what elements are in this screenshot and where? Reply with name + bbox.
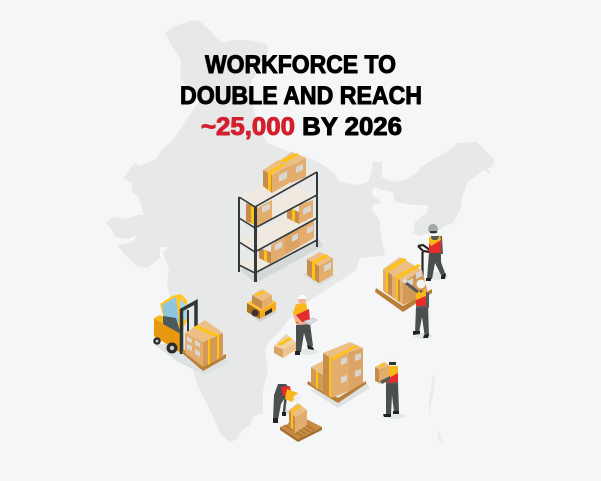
shelf box left — [246, 200, 272, 226]
worker inspecting — [403, 279, 432, 339]
shelf boxes middle — [287, 200, 313, 224]
forklift pallet — [182, 349, 226, 371]
forklift body — [154, 318, 181, 353]
forklift — [153, 294, 230, 375]
title: WORKFORCE TO — [205, 51, 396, 79]
second shelf — [239, 186, 317, 228]
pallet of boxes right — [375, 257, 432, 312]
robot carrier with box — [247, 289, 277, 322]
pallet under box — [280, 418, 322, 439]
third shelf — [239, 209, 317, 252]
top shelf boxes — [263, 152, 306, 193]
India map silhouette — [106, 20, 495, 444]
shelf frame — [239, 172, 317, 282]
title — [180, 51, 422, 141]
shelving unit with boxes — [239, 152, 323, 283]
top shelf — [239, 163, 317, 207]
worker bending over box — [273, 384, 322, 442]
forklift wheels — [153, 337, 161, 345]
pallet of boxes centre — [307, 342, 370, 408]
shelf boxes lower row — [259, 220, 314, 264]
pallet jack — [418, 245, 430, 279]
small box on floor — [274, 334, 296, 358]
title: DOUBLE AND REACH — [180, 82, 422, 110]
worker with clipboard — [293, 295, 318, 355]
forklift mast — [182, 302, 196, 354]
forklift cab — [160, 294, 188, 330]
worker carrying box — [375, 356, 405, 419]
bottom shelf — [239, 231, 317, 273]
loose box — [302, 252, 335, 286]
worker with pallet jack — [418, 224, 448, 281]
title: ~25,000 BY 2026 — [201, 113, 402, 141]
